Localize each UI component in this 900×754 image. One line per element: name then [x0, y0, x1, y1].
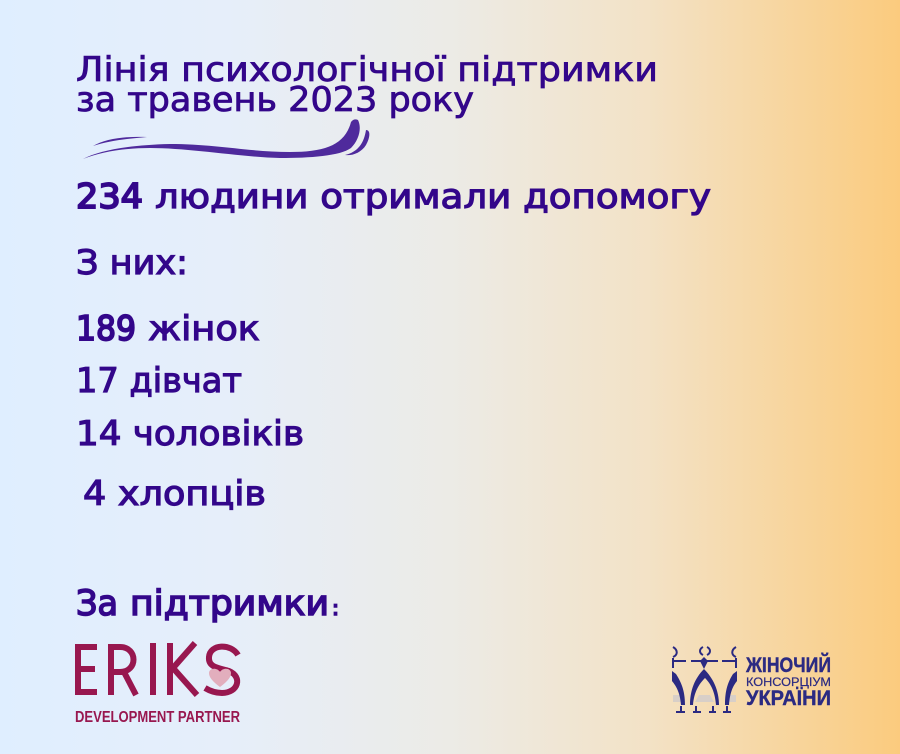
logo: Women's Consortium of Ukraine: УКРАЇНИ — [746, 687, 831, 710]
men count: 14 чоловіків — [76, 414, 304, 454]
total helped: людини отримали допомогу — [155, 177, 711, 217]
women count: жінок — [148, 309, 260, 349]
logo: ERIKS Development Partner — [75, 643, 240, 726]
supported by heading: За — [76, 584, 118, 624]
supported by heading: : — [332, 596, 339, 620]
icon: three figures — [672, 647, 737, 712]
title — [76, 50, 658, 120]
title: Лінія психологічної підтримки — [76, 50, 658, 90]
supported by heading: підтримки — [130, 584, 329, 624]
women count — [76, 309, 260, 349]
logo: Women's Consortium of Ukraine — [672, 647, 831, 712]
of them heading: З них: — [76, 243, 188, 283]
icon: heart — [209, 669, 231, 687]
total helped: 234 — [76, 177, 143, 217]
decorative brush underline — [83, 119, 369, 159]
girls count: 17 дівчат — [76, 361, 242, 401]
title: за травень 2023 року — [76, 80, 474, 120]
boys count: 4 хлопців — [83, 474, 266, 514]
logo: ERIKS Development Partner: DEVELOPMENT PARTNER — [75, 709, 240, 726]
logo: Women's Consortium of Ukraine: КОНСОРЦІУМ — [746, 675, 831, 689]
women count: 189 — [76, 309, 136, 349]
logo: Women's Consortium of Ukraine: ЖІНОЧИЙ — [745, 653, 831, 677]
